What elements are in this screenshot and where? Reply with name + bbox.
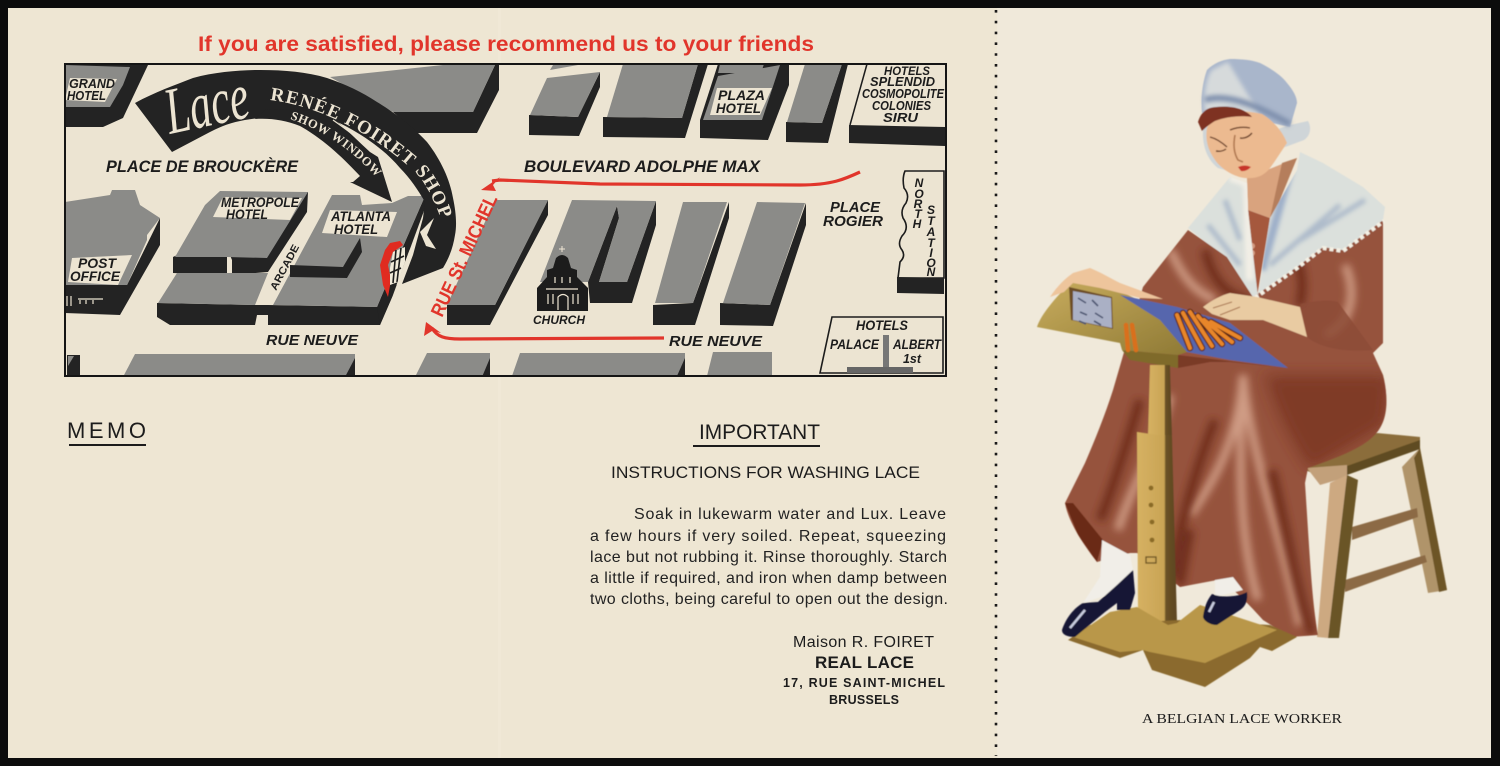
block: Hotels Splendid list: SIRU [883,111,919,125]
caption: A BELGIAN LACE WORKER [1142,711,1342,726]
stool [1300,433,1447,638]
block: Hotels Splendid list: COLONIES [872,99,932,113]
block: centre tall [653,202,729,325]
street labels: RUE NEUVE [266,332,359,349]
street label: Rue St Michel: RUE St. MICHEL [427,191,502,320]
block: North Station: R [914,197,923,211]
block: North Station: T [914,207,923,221]
banner text: show window: SHOW WINDOW [290,112,382,175]
text block: washing instructions: Soak in lukewarm water and Lux. Leave [634,506,946,523]
block: lower left wing [157,273,393,325]
block: Hotels Palace Albert: 1st [903,352,922,366]
heading: recommendation line: If you are satisfied, please recommend us to your friends [198,33,814,56]
street labels: PLACE [830,199,881,216]
block: Hotels Splendid list: COSMOPOLITE [862,87,945,101]
block: Post Office: POST [78,255,117,271]
block: top centre [330,65,499,133]
block: right tall [720,202,806,326]
shop front marker [380,241,410,297]
text block: washing instructions: two cloths, being careful to open out the design. [590,591,948,608]
street labels: BOULEVARD ADOLPHE MAX [524,157,762,176]
head frill [1203,121,1310,172]
text block: washing instructions: a few hours if very soiled. Repeat, squeezing [590,528,946,545]
block: Grand Hotel: HOTEL [67,88,106,103]
left foot [1062,540,1135,637]
street labels: CHURCH [533,313,585,327]
block: Hotels Palace Albert [820,317,943,373]
subheading: washing instructions: INSTRUCTIONS FOR WASHING LACE [611,463,920,482]
pillow stand [1137,365,1177,625]
cap [1201,59,1297,127]
underdress and neck [1247,158,1297,297]
foot board [1068,605,1297,687]
right panel tint [997,8,1491,758]
block: Metropole Hotel: METROPOLE [221,195,300,210]
block: North Station: I [929,246,933,260]
lace pillow [1037,280,1288,368]
block: North Station: A [926,225,935,239]
map ground [65,64,946,376]
subtle centre crease [498,8,501,758]
block: North Station: O [914,187,924,201]
block: church block [540,200,656,303]
illustration: Belgian lace worker [1037,59,1447,687]
sleeve cuff [1300,301,1373,351]
banner script: Lace: Lace [157,60,255,149]
block: Atlanta Hotel: ATLANTA [330,209,391,224]
block: Hotels Splendid list [849,64,945,146]
text block: address: 17, RUE SAINT-MICHEL [783,676,945,690]
bottom row of blocks [67,352,772,377]
dress [1065,220,1390,637]
block: North Station: T [927,214,936,228]
block: Metropole Hotel: HOTEL [226,207,268,222]
block: top row 4 [786,64,848,143]
block: Grand Hotel: GRAND [69,76,116,91]
street labels: RUE NEUVE [669,333,763,350]
text block: washing instructions [590,506,948,608]
bobbins [1126,312,1240,350]
block: top row 1 [529,65,600,136]
text block: address: BRUSSELS [829,693,899,707]
text block: address: REAL LACE [815,653,914,672]
block: right of Rue St Michel [447,200,548,325]
block: Hotels Palace Albert: ALBERT [892,337,943,352]
block: North Station [897,171,944,294]
arrow: Lace Renée Foiret shop banner [135,60,456,284]
block: North Station: N [915,176,924,190]
block: Hotels Splendid list: HOTELS [884,64,930,78]
block: top row 2 [603,64,708,138]
block: North Station: O [926,256,936,270]
block: North Station: H [913,217,922,231]
text block: address [783,634,945,707]
street labels: PLACE DE BROUCKÈRE [106,157,299,176]
text block: washing instructions: lace but not rubbing it. Rinse thoroughly. Starch [590,549,947,566]
block: North Station: T [927,236,936,250]
block: Hotels Palace Albert: PALACE [830,337,880,352]
block: North Station: N [927,265,936,279]
block: Hotels Splendid list: SPLENDID [870,75,935,89]
heading: important: IMPORTANT [699,421,820,444]
face and hair [1198,107,1287,178]
block: Atlanta Hotel: HOTEL [334,222,378,237]
label: arcade: ARCADE [268,243,302,292]
street labels: ROGIER [823,213,883,230]
street labels [106,157,883,350]
heading: memo: MEMO [67,418,146,443]
hands [1050,268,1307,337]
right foot [1203,577,1247,625]
red route: Boulevard Adolphe Max [481,172,860,191]
text block: washing instructions: a little if required, and iron when damp between [590,570,947,587]
text block: address: Maison R. FOIRET [793,634,934,651]
block: North Station: S [927,203,935,217]
block: Metropole Hotel [173,191,308,275]
block: Post Office: OFFICE [70,268,121,284]
block: Post Office [65,190,160,315]
block: Hotels Palace Albert: HOTELS [856,318,908,333]
perforated fold line [995,10,997,756]
banner text: RENÉE FOIRET SHOP [270,88,452,216]
block: Plaza Hotel: PLAZA [718,87,765,103]
icon: church [537,246,588,311]
arrow: show window [255,109,392,202]
block: Grand Hotel [65,65,148,127]
panel: street map [64,60,947,377]
red route: Rue Neuve [424,322,664,339]
lace collar [1188,152,1385,298]
block: Plaza Hotel [700,64,789,140]
block: Plaza Hotel: HOTEL [716,100,761,116]
block: Atlanta Hotel [273,195,428,325]
map frame [65,64,946,376]
